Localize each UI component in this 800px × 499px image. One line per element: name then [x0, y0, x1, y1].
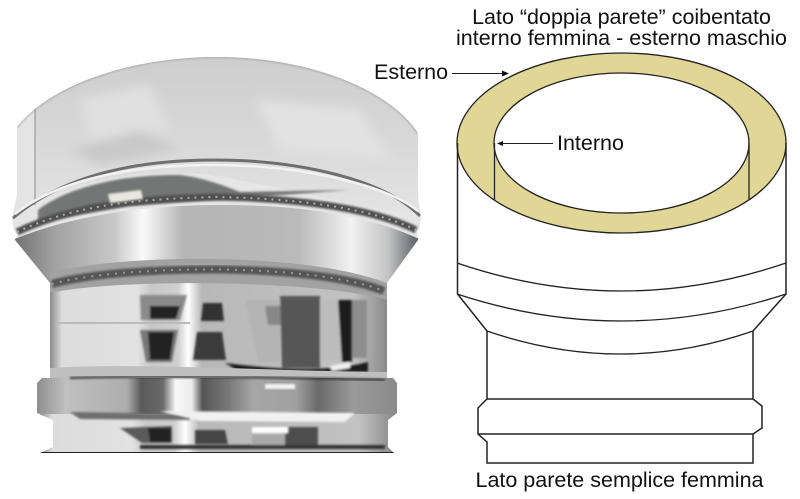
recess below groove — [15, 173, 418, 240]
arrow: Interno — [497, 141, 553, 146]
lower neck — [40, 414, 394, 455]
neck — [50, 283, 387, 372]
collar highlights — [265, 384, 295, 389]
lower collar band — [37, 378, 397, 416]
cap left strip — [17, 110, 34, 166]
neck mid crease — [55, 322, 190, 324]
heading: double wall side: interno femmina - esterno maschio — [456, 26, 787, 50]
bottom edge — [40, 452, 394, 453]
photo: stainless steel chimney adapter — [0, 50, 430, 455]
insulation ring — [457, 53, 786, 233]
shoulder above collar — [50, 366, 387, 378]
weld highlight — [108, 190, 143, 203]
caption: single wall side: Lato parete semplice femmina — [475, 468, 764, 492]
upper body curves — [457, 263, 786, 354]
inner wall lines — [494, 143, 749, 200]
groove ring — [13, 160, 420, 218]
weld seam — [17, 197, 416, 232]
collar top shade — [70, 377, 385, 380]
cap top rim — [17, 57, 418, 133]
diagram: cross-section drawing — [457, 53, 786, 463]
outer body outline — [458, 143, 786, 463]
upper cap cylinder — [0, 50, 430, 230]
arrow: Esterno — [452, 70, 509, 76]
bottom reflections — [120, 426, 385, 449]
cone — [12, 205, 421, 290]
cap seam — [34, 108, 36, 206]
crease — [70, 412, 190, 420]
heading: double wall side: Lato “doppia parete” coibentato — [472, 5, 771, 29]
neck weld band — [50, 259, 387, 300]
neck reflections — [140, 295, 368, 372]
cap soft sheen — [78, 88, 374, 165]
label: Interno: Interno — [557, 131, 624, 155]
collar lines — [478, 399, 753, 434]
recess shadow — [38, 175, 350, 222]
label: Esterno: Esterno — [374, 60, 448, 84]
